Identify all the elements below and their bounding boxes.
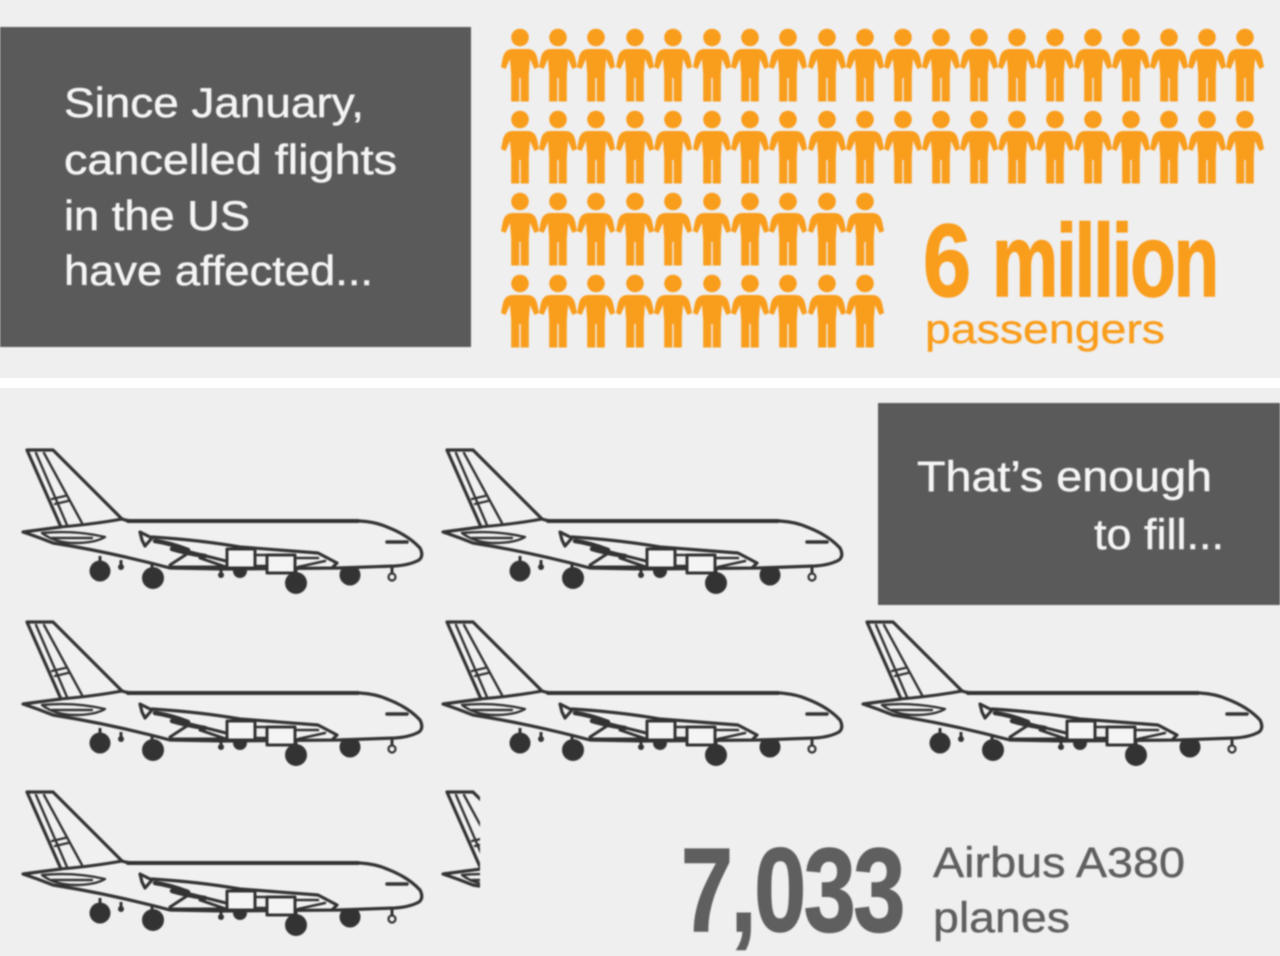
label: Airbus A380 planes: planes bbox=[933, 894, 1070, 942]
text: cancelled flights intro: have affected... bbox=[64, 247, 373, 294]
icon: plane row 1 left bbox=[23, 450, 422, 594]
panel: enough to fill bbox=[878, 403, 1280, 605]
icon: plane row 1 right bbox=[443, 450, 842, 594]
panel: enough to fill: That’s enough bbox=[917, 453, 1212, 501]
pictogram: passengers bbox=[501, 29, 1264, 347]
label: Airbus A380 planes: Airbus A380 bbox=[933, 839, 1185, 887]
panel: enough to fill: to fill... bbox=[1094, 511, 1224, 559]
stat: 6 million passengers: passengers bbox=[925, 306, 1165, 352]
stat: 6 million passengers bbox=[923, 203, 1217, 352]
stat: 7,033: 7,033 bbox=[681, 824, 903, 956]
icon: partial plane bbox=[440, 789, 481, 889]
stat: 6 million passengers: 6 bbox=[923, 203, 971, 318]
text: cancelled flights intro: in the US bbox=[64, 192, 250, 239]
text: cancelled flights intro: Since January, bbox=[64, 79, 364, 126]
icon: plane row 2 middle bbox=[443, 622, 842, 766]
icon: plane row 2 left bbox=[23, 622, 422, 766]
text: cancelled flights intro: cancelled flights bbox=[64, 136, 397, 183]
icon: plane row 3 left bbox=[23, 792, 422, 936]
icon: plane row 2 right bbox=[863, 622, 1262, 766]
panel: since January bbox=[0, 27, 471, 347]
